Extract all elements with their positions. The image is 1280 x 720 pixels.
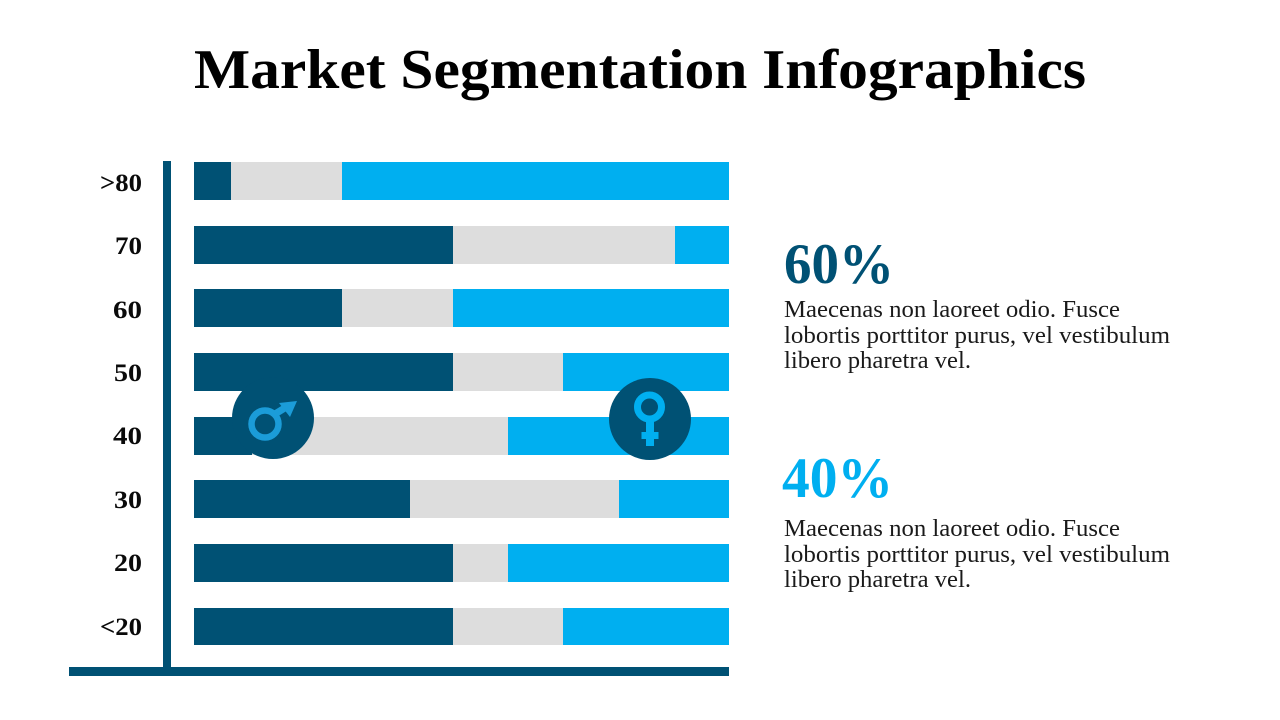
text block: 40% description (784, 516, 1170, 593)
row: 60 (113, 289, 729, 327)
row: 60: 60 (113, 297, 142, 324)
row: <20: <20 (100, 614, 142, 641)
text block: 40% description: libero pharetra vel. (784, 567, 971, 593)
text block: 40% description: Maecenas non laoreet odio. Fusce (784, 516, 1120, 542)
icon: male symbol (232, 377, 314, 459)
row: 30 (114, 480, 729, 518)
text block: 60% description (784, 297, 1170, 374)
row: 70: 70 (115, 233, 142, 260)
row: 20: 20 (114, 550, 142, 577)
x axis (69, 667, 729, 676)
row: 50 (114, 353, 729, 391)
y axis (163, 161, 171, 671)
row: >80 (100, 162, 729, 200)
text block: 60% description: Maecenas non laoreet odio. Fusce (784, 297, 1120, 323)
row: <20 (100, 608, 729, 645)
stat: 60% (784, 233, 1170, 374)
row: 20 (114, 544, 729, 582)
text block: 60% description: libero pharetra vel. (784, 348, 971, 374)
chart: age segmentation stacked bars (69, 161, 729, 676)
stat: 40%: 40% (782, 447, 893, 510)
title: Market Segmentation Infographics (194, 39, 1086, 101)
row: 40 (113, 417, 729, 455)
stat: 60%: 60% (784, 233, 894, 296)
row: >80: >80 (100, 170, 142, 197)
row: 40: 40 (113, 423, 142, 450)
row: 50: 50 (114, 360, 142, 387)
text block: 60% description: lobortis porttitor purus, vel vestibulum (784, 323, 1170, 349)
icon: female symbol (609, 378, 691, 460)
text block: 40% description: lobortis porttitor purus, vel vestibulum (784, 542, 1170, 568)
row: 30: 30 (114, 487, 142, 514)
stat: 40% (782, 447, 1170, 593)
row: 70 (115, 226, 729, 264)
